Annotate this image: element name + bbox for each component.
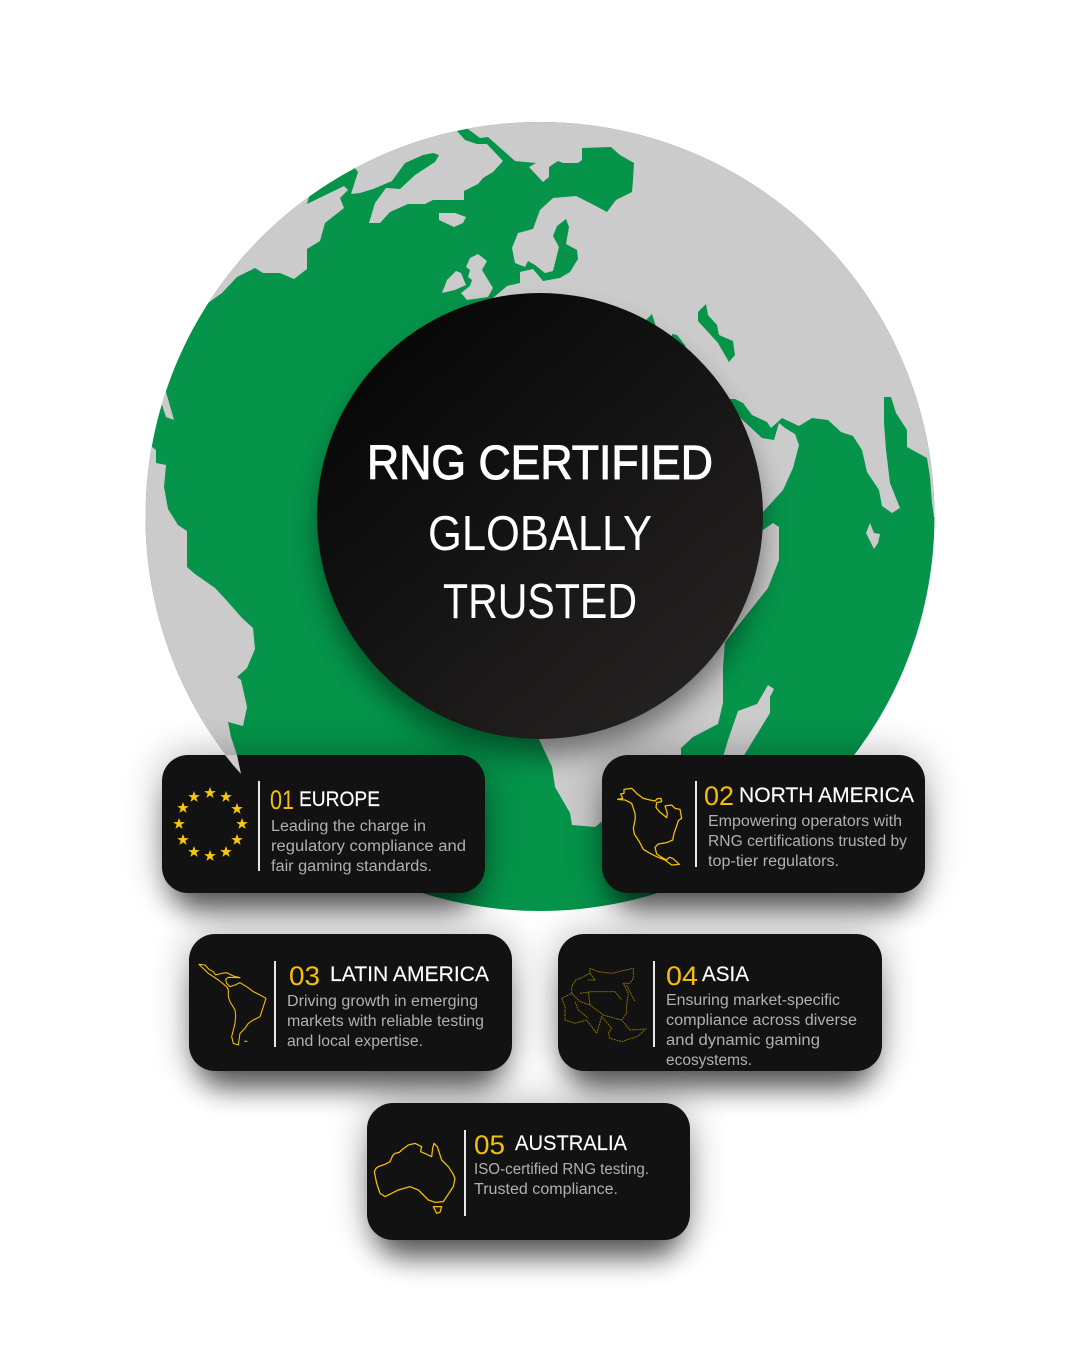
continents (120, 100, 960, 827)
description: ecosystems. (666, 1052, 752, 1069)
card: Latin America (189, 934, 512, 1071)
icon: Australia outline (374, 1143, 455, 1213)
description: top-tier regulators. (708, 853, 839, 870)
description (271, 818, 466, 875)
card: Asia (558, 934, 882, 1071)
card: Europe (162, 755, 485, 893)
icon: Latin America outline (199, 964, 266, 1045)
description: and local expertise. (287, 1033, 423, 1050)
centre badge (317, 293, 763, 739)
headline: TRUSTED: TRUSTED (443, 575, 637, 629)
description (474, 1161, 649, 1198)
divider (464, 1130, 466, 1216)
divider (653, 961, 655, 1047)
headline: RNG CERTIFIED: RNG CERTIFIED (367, 437, 713, 490)
icon: EU stars (173, 787, 248, 861)
number 04: 04 (666, 961, 698, 991)
divider (695, 781, 697, 867)
number 03: 03 (289, 961, 320, 991)
region name: EUROPE (299, 787, 380, 811)
card: North America (602, 755, 925, 893)
region name: LATIN AMERICA (330, 962, 490, 986)
badge disc (317, 293, 763, 739)
globe tip overlapping card (225, 755, 241, 774)
description: Leading the charge in (271, 818, 426, 835)
divider (258, 781, 260, 871)
description: Empowering operators with (708, 813, 902, 830)
description: RNG certifications trusted by (708, 833, 907, 850)
card background (162, 755, 485, 893)
description (708, 813, 907, 870)
icon: North America outline (618, 788, 682, 865)
card background (367, 1103, 690, 1240)
description (666, 992, 857, 1069)
headline: GLOBALLY: GLOBALLY (428, 507, 652, 561)
description: and dynamic gaming (666, 1032, 820, 1049)
description (287, 993, 484, 1050)
region name: AUSTRALIA (515, 1131, 628, 1155)
ocean disc (146, 122, 934, 911)
card background (189, 934, 512, 1071)
globe (120, 100, 960, 911)
card: Australia (367, 1103, 690, 1240)
number 02: 02 (704, 781, 734, 811)
islands and coast details (640, 304, 735, 362)
region name: ASIA (702, 962, 750, 986)
description: ISO-certified RNG testing. (474, 1161, 649, 1178)
divider (274, 961, 276, 1047)
card background (558, 934, 882, 1071)
number 05: 05 (474, 1130, 505, 1160)
description: Trusted compliance. (474, 1181, 618, 1198)
description: regulatory compliance and (271, 838, 466, 855)
description: Driving growth in emerging (287, 993, 478, 1010)
description: compliance across diverse (666, 1012, 857, 1029)
number 01: 01 (270, 785, 294, 815)
description: Ensuring market-specific (666, 992, 840, 1009)
infographic canvas (139, 122, 948, 1278)
description: fair gaming standards. (271, 858, 432, 875)
icon: Asia outline (562, 968, 646, 1042)
region name: NORTH AMERICA (739, 783, 915, 807)
card background (602, 755, 925, 893)
centre circle shadow (319, 313, 761, 755)
description: markets with reliable testing (287, 1013, 484, 1030)
